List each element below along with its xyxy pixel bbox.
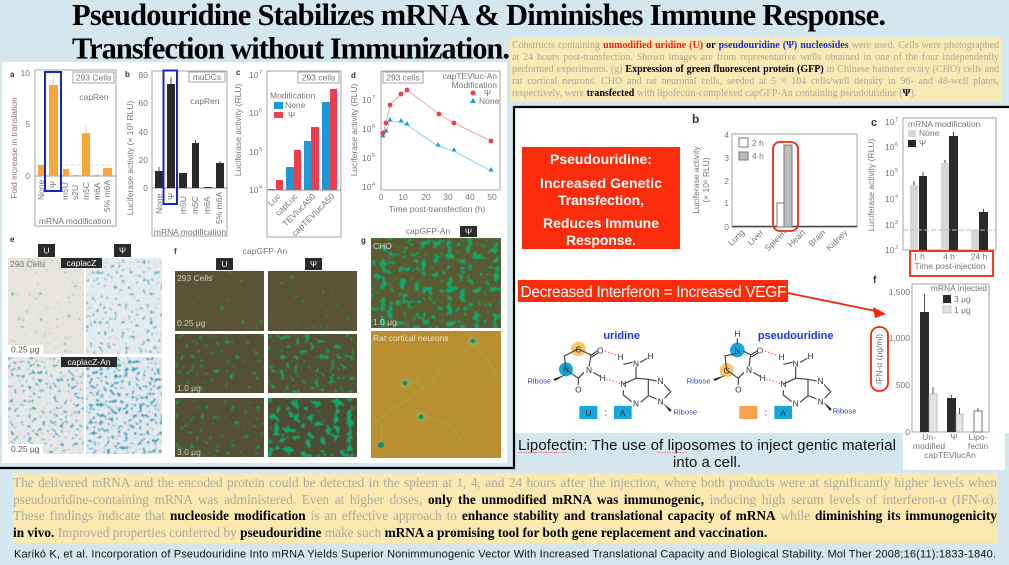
callout: pseudouridine summary box: Reduces Immune [543, 215, 659, 231]
chart f: IFN-alpha levels: f [873, 275, 877, 286]
chart b: luciferase activity muDCs: b [125, 70, 130, 79]
diagram: uridine and pseudouridine base pairing: A [620, 408, 626, 418]
chart a: fold increase in translation: 0 [25, 171, 30, 181]
chart b: organ luciferase activity: 4 [724, 130, 729, 140]
chart d: luciferase time course: 6 [372, 124, 375, 130]
text: lipofectin definition: into a cell. [673, 454, 741, 471]
chart c: luciferase activity 293 cells: 6 [259, 108, 262, 114]
diagram: uridine and pseudouridine base pairing: H [618, 352, 624, 362]
diagram: uridine and pseudouridine base pairing: U [585, 408, 591, 418]
panel g: CHO and rat neurons micrographs: Rat cortical neurons [373, 333, 449, 343]
chart d: luciferase time course: 50 [487, 192, 497, 202]
diagram: uridine and pseudouridine base pairing: C [724, 365, 730, 375]
diagram: uridine and pseudouridine base pairing: Ribose [527, 376, 551, 385]
chart c: luciferase post-injection: 24 h [971, 252, 988, 262]
text block: experimental description: Constructs containing unmodified uridine (U) or pseudouridine (Ψ) nucleosides were used. Cells were photographed [512, 40, 999, 51]
chart d: luciferase time course: capTEVluc-An [443, 71, 497, 81]
chart c: luciferase post-injection: 3 [895, 220, 898, 226]
chart a: fold increase in translation: None [36, 179, 46, 200]
chart c: luciferase activity 293 cells: c [236, 68, 241, 77]
panel e: caplacZ micrographs [8, 235, 162, 454]
panel e: caplacZ micrographs: caplacZ-An [68, 357, 111, 367]
diagram: uridine and pseudouridine base pairing: O [735, 384, 742, 394]
text: lipofectin definition: Lipofectin: The use of liposomes to inject gentic material [518, 437, 896, 454]
chart b: luciferase activity muDCs: m5U [178, 196, 188, 214]
chart d: luciferase time course: 10 [362, 95, 372, 105]
chart b: organ luciferase activity: Brain [806, 227, 828, 248]
panel f: capGFP micrographs: capGFP-An [243, 246, 287, 256]
chart d: luciferase time course: 4 [372, 182, 375, 188]
panel g: CHO and rat neurons micrographs: CHO [373, 241, 392, 251]
chart c: luciferase post-injection: 10 [885, 142, 895, 152]
diagram: uridine and pseudouridine base pairing: H [760, 373, 766, 383]
chart d: luciferase time course: 20 [421, 192, 431, 202]
diagram: uridine and pseudouridine base pairing: N [818, 396, 824, 406]
chart d: luciferase time course: 293 cells [386, 72, 420, 82]
chart c: luciferase activity 293 cells: 5 [259, 147, 262, 153]
chart c: luciferase activity 293 cells: Ψ [288, 110, 295, 120]
diagram: uridine and pseudouridine base pairing: O [597, 345, 604, 355]
chart b: organ luciferase activity: 3 [724, 153, 729, 163]
chart a: fold increase in translation: m5U [60, 182, 70, 200]
panel g: CHO and rat neurons micrographs: g [361, 236, 366, 245]
chart b: luciferase activity muDCs: 5% m6A [214, 192, 224, 224]
chart d: luciferase time course: Ψ [484, 88, 491, 98]
chart b: luciferase activity muDCs: mRNA modification [154, 227, 226, 237]
chart c: luciferase post-injection: None [919, 128, 940, 138]
text block: conclusions: The delivered mRNA and the encoded protein could be detected in the spleen at 1, 4, and 24 hours after the injection, where both products were at significantly higher levels when [13, 475, 997, 490]
chart b: organ luciferase activity: Lung [726, 227, 747, 248]
diagram: uridine and pseudouridine base pairing: Ribose [687, 376, 711, 385]
chart f: IFN-alpha levels: mRNA injected [931, 283, 987, 293]
chart c: luciferase activity 293 cells: Luc [266, 191, 283, 208]
chart b: organ luciferase activity: Liver [745, 227, 766, 247]
chart c: luciferase post-injection: 4 h [943, 252, 955, 262]
chart a: fold increase in translation: m6A [92, 182, 102, 200]
chart c: luciferase post-injection: Luciferase activity (RLU) [866, 139, 876, 231]
panel f: capGFP micrographs: U [221, 259, 228, 269]
chart c: luciferase post-injection: Time post-injection [914, 261, 986, 271]
chart c: luciferase post-injection: 10 [885, 220, 895, 230]
chart c: luciferase activity 293 cells: 10 [249, 70, 259, 80]
panel f: capGFP micrographs: 293 Cells [177, 273, 212, 283]
panel e: caplacZ micrographs: 0.25 μg [11, 444, 40, 454]
chart a: fold increase in translation: Ψ [48, 181, 58, 188]
text block: experimental description: respectively, were transfected with lipofectin-complexed capGFP-An containing pseudouridine (Ψ). [512, 88, 916, 99]
chart a: fold increase in translation: m5C [81, 182, 91, 200]
diagram: uridine and pseudouridine base pairing: O [757, 345, 764, 355]
panel f: capGFP micrographs: 0.25 μg [177, 318, 206, 328]
diagram: uridine and pseudouridine base pairing: O [575, 384, 582, 394]
chart f: IFN-alpha levels: 1,000 [889, 333, 910, 343]
title: main heading [72, 0, 886, 66]
diagram: uridine and pseudouridine base pairing: N [658, 396, 664, 406]
chart c: luciferase activity 293 cells: TEVlucA50 [280, 191, 318, 228]
title: main heading: Transfection without Immunization. [72, 32, 510, 66]
chart b: luciferase activity muDCs: m5C [190, 196, 200, 214]
chart b: luciferase activity muDCs: 80 [139, 70, 148, 80]
chart f: IFN-alpha levels [871, 275, 1005, 470]
chart b: luciferase activity muDCs: 20 [139, 155, 148, 165]
panel: left figure background [2, 62, 507, 463]
diagram: uridine and pseudouridine base pairing [527, 328, 857, 419]
chart c: luciferase activity 293 cells: 4 [259, 185, 262, 191]
chart d: luciferase time course: 30 [443, 192, 453, 202]
chart f: IFN-alpha levels: capTEVlucAn [924, 450, 976, 460]
diagram: uridine and pseudouridine base pairing: N [734, 345, 740, 355]
diagram: uridine and pseudouridine base pairing: H [779, 352, 785, 362]
panel e: caplacZ micrographs: 293 Cells [10, 259, 45, 269]
chart b: luciferase activity muDCs: 0 [143, 183, 148, 193]
text block: experimental description: at 24 hours post-transfection. Shown images are from representative wells obtained in one of the four independently [512, 52, 999, 63]
diagram: uridine and pseudouridine base pairing: N [818, 376, 824, 386]
chart a: fold increase in translation [9, 68, 116, 226]
chart a: fold increase in translation: Fold increase in translation [9, 97, 19, 199]
chart d: luciferase time course: 7 [372, 95, 375, 101]
citation: Karikó K, et al. Incorporation of Pseudouridine Into mRNA Yields Superior Nonimmunogenic Vector With Increased Translational Capacity and Biological Stability. Mol Ther 2008;16(11):1833-1840. [14, 548, 996, 560]
panel f: capGFP micrographs: f [174, 247, 177, 256]
text: lipofectin definition [518, 437, 896, 471]
chart d: luciferase time course: 5 [372, 153, 375, 159]
chart c: luciferase activity 293 cells: 10 [249, 185, 259, 195]
chart c: luciferase activity 293 cells: 10 [249, 147, 259, 157]
chart d: luciferase time course: 10 [398, 192, 408, 202]
panel g: CHO and rat neurons micrographs: capGFP-An [406, 226, 450, 236]
panel g: CHO and rat neurons micrographs: 1.0 μg [373, 317, 397, 327]
chart d: luciferase time course: 40 [465, 192, 475, 202]
chart f: IFN-alpha levels: Lipo- [969, 432, 988, 442]
chart b: luciferase activity muDCs: None [154, 193, 164, 214]
chart d: luciferase time course [349, 71, 500, 214]
banner: decreased interferon: Decreased Interferon = Increased VEGF [520, 284, 786, 301]
callout: pseudouridine summary box: Increased Genetic [540, 175, 662, 191]
chart f: IFN-alpha levels: Un- [922, 432, 936, 442]
panel e: caplacZ micrographs: caplacZ [67, 258, 96, 268]
callout: pseudouridine summary box [522, 147, 680, 249]
text block: conclusions: in vivo. Improved properties conferred by pseudouridine make such mRNA a promising tool for both gene replacement and vaccination. [13, 525, 767, 540]
chart d: luciferase time course: 10 [362, 182, 372, 192]
callout: pseudouridine summary box: Response. [566, 232, 636, 248]
callout: pseudouridine summary box: Transfection, [558, 192, 644, 208]
chart c: luciferase post-injection: mRNA modification [908, 119, 981, 129]
panel f: capGFP micrographs: Ψ [310, 259, 317, 269]
chart a: fold increase in translation: 5 [25, 119, 30, 129]
text block: conclusions: These findings indicate that nucleoside modification is an effective approach to enhance stability and translational capacity of mRNA while diminishing its immunogenicity [13, 508, 997, 523]
diagram: uridine and pseudouridine base pairing: N [780, 379, 786, 389]
chart f: IFN-alpha levels: 500 [896, 380, 910, 390]
chart c: luciferase activity 293 cells: capTEVlucA50 [290, 191, 337, 238]
chart b: luciferase activity muDCs: 40 [139, 127, 148, 137]
diagram: uridine and pseudouridine base pairing: H [600, 373, 606, 383]
chart c: luciferase activity 293 cells [233, 68, 341, 238]
diagram: uridine and pseudouridine base pairing: A [780, 408, 786, 418]
panel f: capGFP micrographs [174, 246, 357, 457]
diagram: uridine and pseudouridine base pairing: N [746, 365, 752, 375]
chart c: luciferase post-injection: 4 [895, 194, 898, 200]
chart c: luciferase activity 293 cells: 10 [249, 108, 259, 118]
chart c: luciferase post-injection: 1 h [913, 252, 925, 262]
chart c: luciferase post-injection [866, 117, 996, 276]
chart b: luciferase activity muDCs: 60 [139, 98, 148, 108]
chart f: IFN-alpha levels: Ψ [950, 432, 958, 442]
chart c: luciferase post-injection: 7 [895, 117, 898, 123]
chart f: IFN-alpha levels: fectin [968, 441, 988, 451]
chart b: organ luciferase activity: Kidney [824, 227, 850, 253]
chart b: organ luciferase activity: 1 [724, 198, 729, 208]
chart a: fold increase in translation: 10 [21, 68, 30, 78]
chart b: organ luciferase activity: 2 h [752, 138, 764, 148]
chart d: luciferase time course: Modification [452, 80, 497, 90]
diagram: uridine and pseudouridine base pairing: N [793, 359, 799, 369]
chart c: luciferase activity 293 cells: None [285, 100, 306, 110]
diagram: uridine and pseudouridine base pairing: H [808, 351, 814, 361]
diagram: uridine and pseudouridine base pairing: Ribose [673, 407, 697, 416]
chart b: organ luciferase activity: 2 [724, 176, 729, 186]
chart a: fold increase in translation: capRen [79, 92, 109, 102]
diagram: uridine and pseudouridine base pairing: C [575, 344, 581, 354]
chart c: luciferase activity 293 cells: 7 [259, 70, 262, 76]
panel: right figure background [0, 107, 1009, 468]
chart c: luciferase post-injection: 5 [895, 168, 898, 174]
diagram: uridine and pseudouridine base pairing: : [764, 408, 767, 418]
panel e: caplacZ micrographs: e [10, 235, 15, 244]
diagram: uridine and pseudouridine base pairing: N [633, 399, 639, 409]
diagram: uridine and pseudouridine base pairing: N [620, 379, 626, 389]
chart c: luciferase activity 293 cells: Modification [270, 90, 316, 100]
text block: conclusions: pseudouridine-containing mRNA was administered. Even at higher doses, only the unmodified mRNA was immunogenic, inducing high serum levels of interferon-α (IFN-α). [13, 492, 997, 507]
diagram: uridine and pseudouridine base pairing: N [586, 365, 592, 375]
chart c: luciferase post-injection: c [871, 117, 877, 129]
panel g: CHO and rat neurons micrographs: Ψ [465, 226, 472, 236]
panel f: capGFP micrographs: 1.0 μg [177, 383, 201, 393]
chart b: luciferase activity muDCs: muDCs [193, 72, 221, 82]
chart f: IFN-alpha levels: 1 μg [954, 305, 971, 315]
diagram: uridine and pseudouridine base pairing: Ribose [833, 406, 857, 415]
chart b: luciferase activity muDCs: capRen [190, 96, 220, 106]
chart b: luciferase activity muDCs: m6A [202, 196, 212, 214]
diagram: uridine and pseudouridine base pairing: pseudouridine [758, 330, 834, 342]
chart b: organ luciferase activity: 4 h [752, 151, 764, 161]
chart d: luciferase time course: 10 [362, 153, 372, 163]
panel: lipofectin note background [516, 433, 903, 467]
chart d: luciferase time course: 10 [362, 124, 372, 134]
chart c: luciferase post-injection: 10 [885, 245, 895, 255]
chart f: IFN-alpha levels: 1,500 [889, 287, 910, 297]
chart d: luciferase time course: Luciferase activity (RLU) [349, 84, 359, 176]
chart c: luciferase activity 293 cells: 293 cells [302, 72, 335, 82]
chart f: IFN-alpha levels: IFN-α (pg/ml) [874, 334, 884, 384]
chart c: luciferase post-injection: 10 [885, 194, 895, 204]
chart c: luciferase post-injection: 6 [895, 142, 898, 148]
chart b: organ luciferase activity: Luciferase activity [691, 145, 701, 214]
diagram: uridine and pseudouridine base pairing: H [648, 351, 654, 361]
chart f: IFN-alpha levels: 3 μg [954, 294, 971, 304]
diagram: uridine and pseudouridine base pairing: : [604, 408, 607, 418]
chart a: fold increase in translation: 293 Cells [76, 72, 111, 82]
arrow: banner to IFN chart [788, 293, 886, 318]
chart a: fold increase in translation: mRNA modification [39, 216, 111, 226]
panel f: capGFP micrographs: 3.0 μg [177, 447, 201, 457]
panel e: caplacZ micrographs: 0.25 μg [11, 344, 40, 354]
chart c: luciferase post-injection: 10 [885, 117, 895, 127]
text block: experimental description: performed experiments. (g) Expression of green fluorescent protein (GFP) in Chinese hamster ovary (CHO) cells and [512, 64, 999, 75]
chart b: organ luciferase activity: Heart [786, 227, 808, 249]
chart c: luciferase activity 293 cells: Luciferase activity (RLU) [233, 84, 243, 176]
chart c: luciferase activity 293 cells: capLuc [273, 191, 300, 218]
chart d: luciferase time course: Time post-transfection (h) [389, 204, 485, 214]
chart a: fold increase in translation: 5% m6A [102, 180, 112, 212]
diagram: uridine and pseudouridine base pairing: N [633, 359, 639, 369]
chart b: organ luciferase activity: b [692, 112, 699, 126]
chart b: luciferase activity muDCs [125, 70, 227, 237]
panel e: caplacZ micrographs: U [43, 246, 50, 256]
chart c: luciferase post-injection: Ψ [919, 138, 926, 148]
chart a: fold increase in translation: s2U [70, 185, 80, 200]
diagram: uridine and pseudouridine base pairing: N [658, 376, 664, 386]
callout: pseudouridine summary box: Pseudouridine: [550, 151, 652, 167]
chart f: IFN-alpha levels: modified [913, 441, 945, 451]
chart b: organ luciferase activity: 0 [724, 222, 729, 232]
chart a: fold increase in translation: a [10, 70, 15, 79]
chart c: luciferase post-injection: 10 [885, 168, 895, 178]
text block: experimental description [510, 37, 1002, 102]
chart f: IFN-alpha levels: 0 [905, 427, 910, 437]
chart d: luciferase time course: None [479, 96, 500, 106]
chart b: organ luciferase activity [691, 112, 857, 253]
diagram: uridine and pseudouridine base pairing: N [793, 399, 799, 409]
chart b: luciferase activity muDCs: Luciferase activity (× 10³ RLU) [125, 101, 135, 215]
diagram: uridine and pseudouridine base pairing: uridine [603, 330, 640, 342]
chart b: luciferase activity muDCs: Ψ [166, 193, 176, 200]
chart d: luciferase time course: d [351, 71, 356, 80]
text block: conclusions [13, 473, 997, 543]
diagram: uridine and pseudouridine base pairing: N [563, 365, 569, 375]
chart b: organ luciferase activity: (× 10⁶ RLU) [701, 157, 711, 203]
chart b: organ luciferase activity: Spleen [763, 227, 789, 253]
diagram: uridine and pseudouridine base pairing: H [734, 328, 740, 338]
chart d: luciferase time course: 0 [379, 192, 384, 202]
panel e: caplacZ micrographs: Ψ [119, 246, 126, 256]
panel g: CHO and rat neurons micrographs [361, 226, 501, 458]
text block: experimental description: rat cortical neurons. CHO and rat neuronal cells, seeded at 5 × 104 cells/well density in 96- and 48-well plates, [512, 76, 999, 87]
chart c: luciferase post-injection: 2 [895, 245, 898, 251]
